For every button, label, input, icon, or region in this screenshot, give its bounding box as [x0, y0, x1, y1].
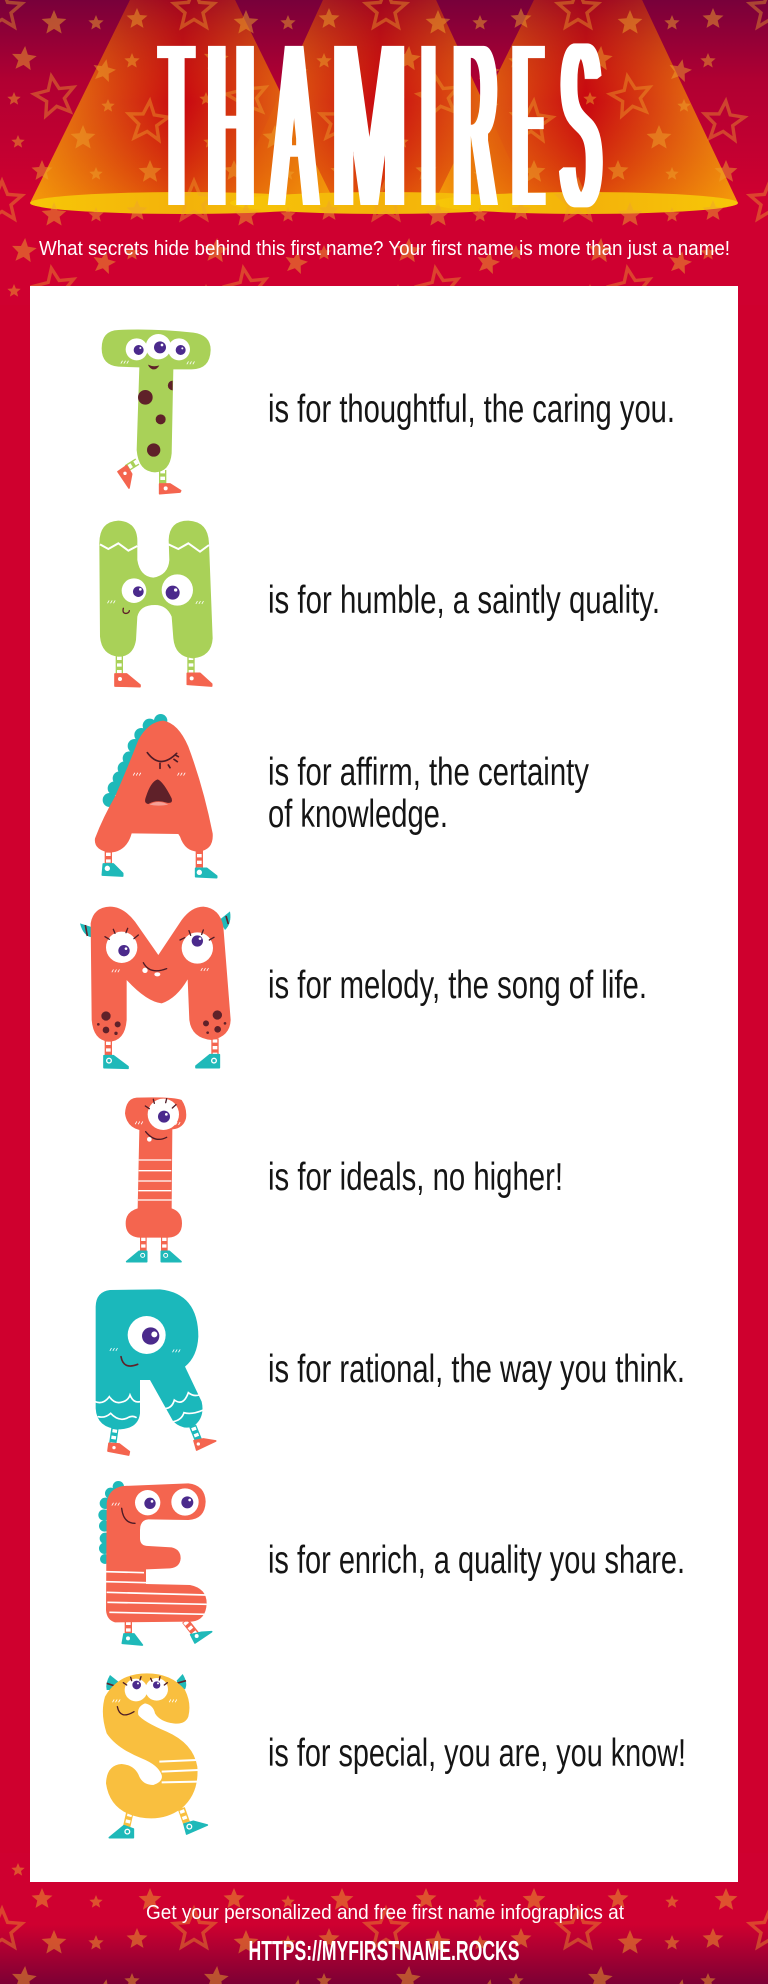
monster letter E — [98, 1481, 212, 1645]
letter text: M: is for melody, the song of life. — [268, 964, 647, 1007]
footer text: Get your personalized and free first name infographics at — [146, 1902, 624, 1924]
spotlights — [30, 0, 738, 214]
monster letter S — [103, 1673, 207, 1838]
letter text: A: is for affirm, the certainty — [268, 751, 589, 794]
plain red frame behind card — [0, 305, 768, 1853]
monster letter R — [95, 1289, 216, 1455]
monster letter H — [99, 521, 213, 687]
subtitle: What secrets hide behind this first name? Your first name is more than just a name! — [39, 238, 730, 260]
footer url: HTTPS://MYFIRSTNAME.ROCKS — [248, 1935, 520, 1966]
monster letter M — [80, 907, 231, 1068]
panel: white card — [30, 286, 738, 1882]
monster letter I — [125, 1097, 186, 1262]
monster letter A — [95, 714, 217, 878]
monster letter T — [102, 330, 211, 494]
title — [157, 0, 603, 259]
letter text: I: is for ideals, no higher! — [268, 1156, 563, 1199]
letter text: A: of knowledge. — [268, 793, 448, 836]
